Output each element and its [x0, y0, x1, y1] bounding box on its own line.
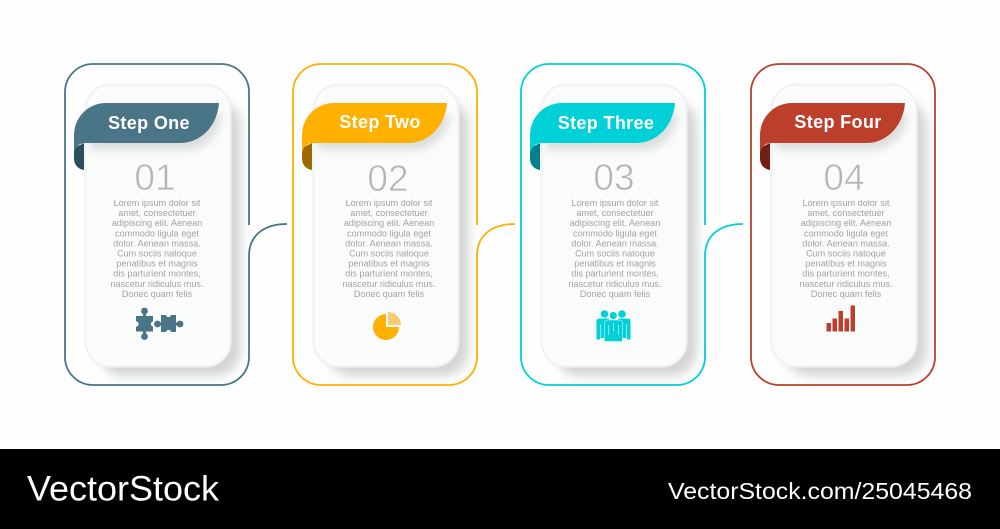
- outline frame with connector: [65, 64, 287, 385]
- icon: bar chart: [826, 306, 855, 332]
- body text: dis parturient montes,: [571, 269, 659, 279]
- body text: Donec quam felis: [811, 289, 882, 299]
- ribbon heading: [760, 103, 908, 170]
- body text: Cum sociis natoque: [575, 248, 655, 258]
- body text: Cum sociis natoque: [806, 248, 886, 258]
- body text: nascetur ridiculus mus.: [342, 279, 436, 289]
- icon: people: [596, 310, 630, 342]
- panel: step three: [521, 64, 743, 385]
- ribbon heading: Step Three: [558, 113, 654, 133]
- outline frame with connector: [293, 64, 515, 385]
- body text: adipiscing elit. Aenean: [112, 218, 202, 228]
- body text: amet, consectetuer: [576, 208, 654, 218]
- body text: commodo ligula eget: [115, 228, 199, 238]
- body text: Lorem ipsum dolor sit: [114, 198, 201, 208]
- ribbon heading: Step One: [108, 113, 190, 133]
- body text: nascetur ridiculus mus.: [568, 279, 662, 289]
- body text: amet, consectetuer: [807, 208, 885, 218]
- body text: dis parturient montes,: [802, 269, 890, 279]
- body text: Lorem ipsum dolor sit: [572, 198, 659, 208]
- body text: commodo ligula eget: [804, 228, 888, 238]
- body text: Donec quam felis: [580, 289, 651, 299]
- body text: dolor. Aenean massa.: [571, 238, 659, 248]
- footer logo text: VectorStock: [27, 470, 220, 508]
- icon: pie chart: [373, 312, 401, 340]
- panel: step one: [65, 64, 287, 385]
- panel: step two: [293, 64, 515, 385]
- body text: adipiscing elit. Aenean: [801, 218, 891, 228]
- body text: penatibus et magnis: [805, 259, 887, 269]
- body text: Lorem ipsum dolor sit: [803, 198, 890, 208]
- ribbon heading: [302, 103, 450, 170]
- ribbon heading: [530, 103, 678, 170]
- body text: amet, consectetuer: [118, 208, 196, 218]
- card: [542, 84, 697, 376]
- body text: adipiscing elit. Aenean: [344, 218, 434, 228]
- body text: Lorem ipsum dolor sit: [346, 198, 433, 208]
- card: [314, 84, 469, 376]
- number: 04: [823, 157, 865, 198]
- body text: dolor. Aenean massa.: [345, 238, 433, 248]
- number: 01: [134, 157, 176, 198]
- body text: adipiscing elit. Aenean: [570, 218, 660, 228]
- footer bar: [0, 449, 1000, 529]
- card: [772, 84, 927, 376]
- body text: dolor. Aenean massa.: [802, 238, 890, 248]
- footer url text: VectorStock.com/25045468: [668, 478, 972, 504]
- body text: Donec quam felis: [354, 289, 425, 299]
- body text: penatibus et magnis: [348, 259, 430, 269]
- number: 03: [593, 157, 635, 198]
- body text: dolor. Aenean massa.: [113, 238, 201, 248]
- body text: Cum sociis natoque: [117, 248, 197, 258]
- outline frame: [751, 64, 935, 385]
- body text: dis parturient montes,: [113, 269, 201, 279]
- icon: puzzle: [133, 308, 183, 340]
- body text: Donec quam felis: [122, 289, 193, 299]
- panel: step four: [751, 64, 935, 385]
- body text: commodo ligula eget: [573, 228, 657, 238]
- number: 02: [367, 158, 409, 199]
- body text: penatibus et magnis: [574, 259, 656, 269]
- ribbon heading: [74, 103, 222, 170]
- body text: nascetur ridiculus mus.: [800, 279, 892, 289]
- card: [86, 84, 241, 376]
- body text: Cum sociis natoque: [349, 248, 429, 258]
- ribbon heading: Step Two: [339, 112, 421, 132]
- body text: commodo ligula eget: [347, 228, 431, 238]
- body text: penatibus et magnis: [116, 259, 198, 269]
- body text: nascetur ridiculus mus.: [110, 279, 204, 289]
- body text: dis parturient montes,: [345, 269, 433, 279]
- ribbon heading: Step Four: [794, 112, 882, 132]
- outline frame with connector: [521, 64, 743, 385]
- body text: amet, consectetuer: [350, 208, 428, 218]
